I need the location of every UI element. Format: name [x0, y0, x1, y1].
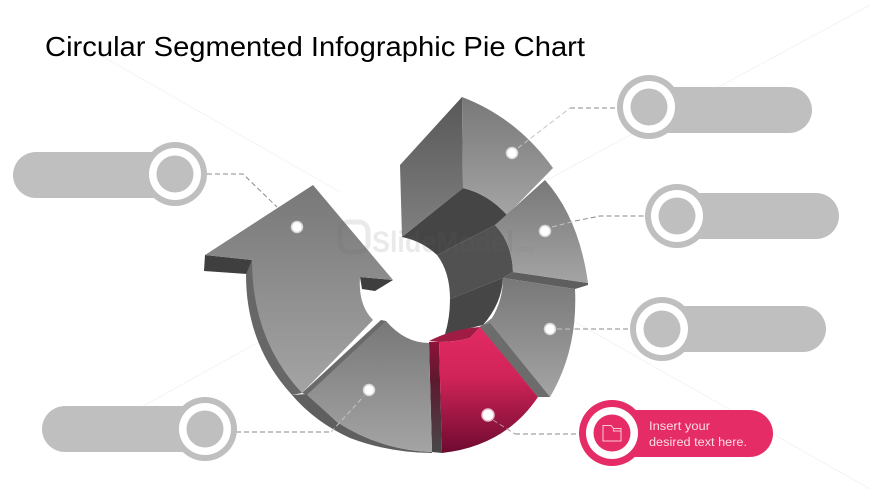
segment: arrow	[204, 185, 393, 395]
callout: top right	[617, 75, 812, 139]
icon: folder	[603, 426, 621, 441]
callout: middle right	[645, 184, 839, 248]
connector lines	[207, 108, 646, 434]
inner walls	[402, 188, 513, 334]
3D segmented arrow chart	[204, 97, 588, 453]
segment: pink highlighted	[429, 327, 538, 453]
segment: lower right	[479, 278, 575, 397]
marker dots	[292, 148, 556, 421]
callout: highlighted pink	[579, 400, 773, 466]
segment: bottom left	[292, 321, 432, 453]
callout: lower right	[630, 297, 826, 361]
callout: left	[13, 142, 207, 206]
callout: bottom left	[42, 397, 237, 461]
segment: top block	[400, 97, 553, 237]
title: Circular Segmented Infographic Pie Chart	[45, 31, 585, 62]
watermark: .com	[514, 244, 534, 254]
watermark: SlideModel	[372, 226, 514, 259]
callout text: desired text here.	[649, 437, 747, 449]
segment: upper right	[495, 180, 588, 289]
connector lines over the chart	[331, 108, 575, 434]
callout text: Insert your	[649, 421, 710, 433]
